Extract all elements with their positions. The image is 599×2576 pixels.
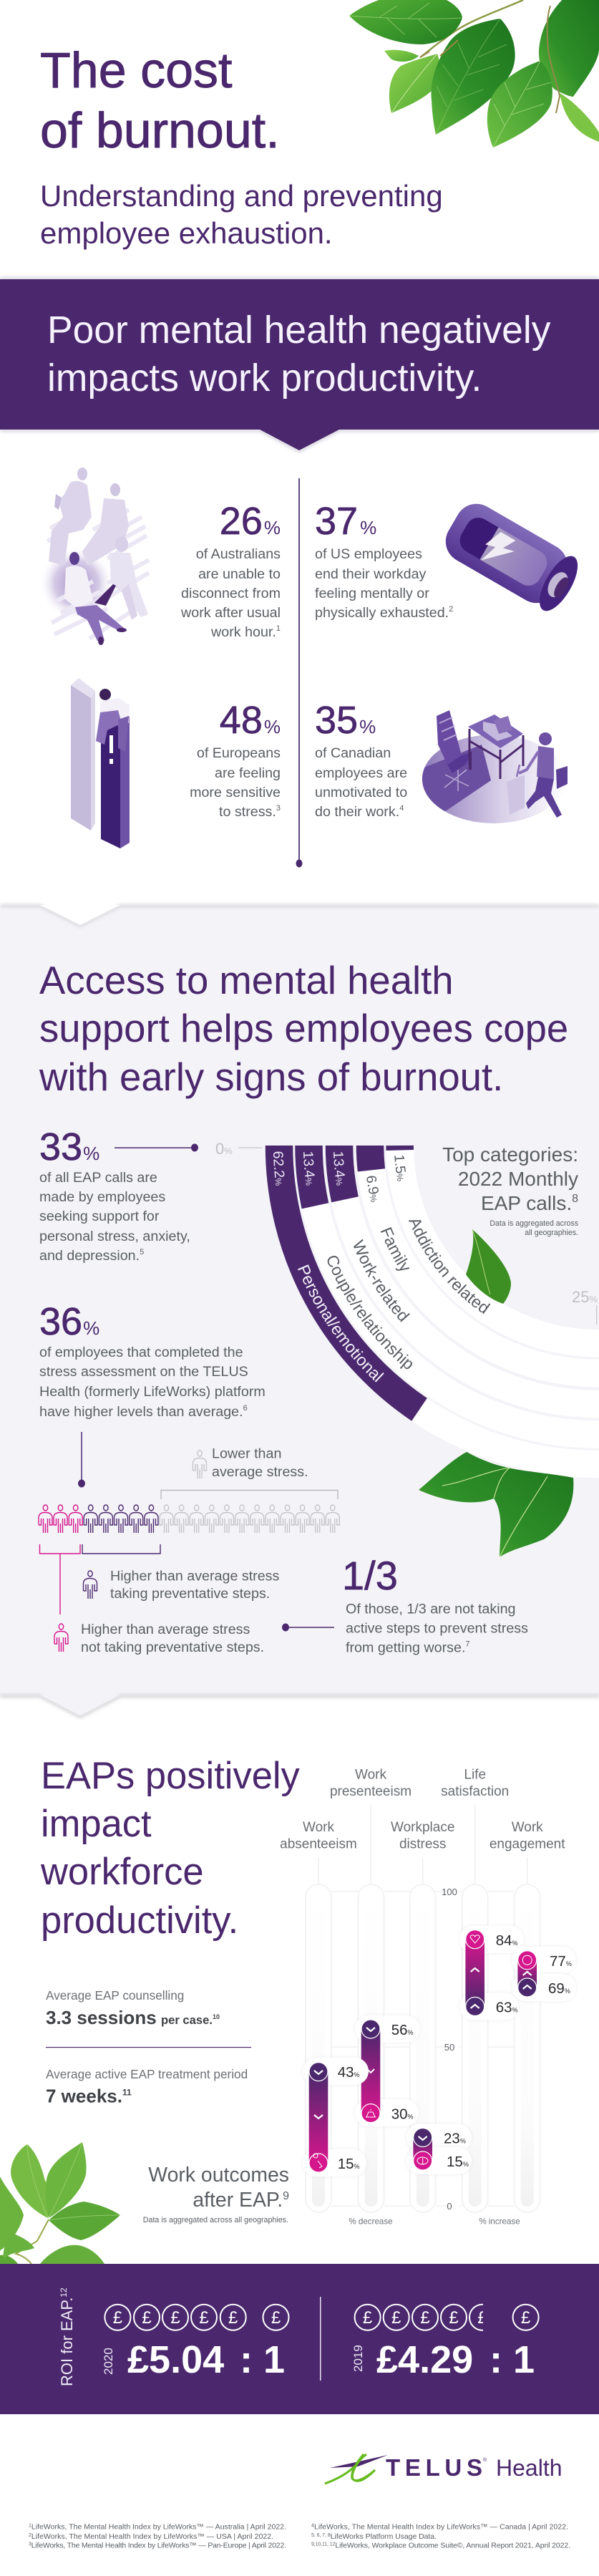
- footnotes right: LifeWorks, The Mental Health Index by LifeWorks™ — Canada | April 2022.: [314, 2523, 568, 2532]
- panel: ROI band: [0, 2264, 599, 2414]
- chart: work outcomes capsules: presenteeism: [330, 1784, 411, 1799]
- stat: 37% US employees: end their workday: [315, 566, 427, 582]
- value 2019: :: [490, 2338, 502, 2381]
- icon: desk and person leaving: [419, 710, 568, 823]
- stat: 48% Europeans: 48%: [220, 699, 281, 742]
- bar: workplace distress: 15%: [447, 2154, 469, 2170]
- coins 2020: £: [142, 2308, 152, 2328]
- fractional coin: [513, 2305, 539, 2330]
- legend: higher not taking steps: [54, 1622, 264, 1655]
- gray people: [160, 1505, 339, 1533]
- value 2020: 2020: [102, 2348, 115, 2375]
- stat: counselling sessions: Average EAP counselling: [46, 1988, 184, 2003]
- coins 2020: £: [199, 2308, 209, 2328]
- stat: treatment period: 11: [122, 2088, 132, 2098]
- logo: TELUS Health: Health: [496, 2455, 563, 2481]
- value 2019: 2019: [351, 2345, 365, 2372]
- chart title: top categories: Data is aggregated across: [490, 1219, 578, 1228]
- stat: 35% Canadian employees: employees are: [315, 765, 407, 781]
- stat: 26% Australians: are unable to: [198, 566, 281, 582]
- chart title: work outcomes: Work outcomes: [148, 2164, 289, 2187]
- dark people: [84, 1505, 158, 1533]
- coins 2020: £: [271, 2308, 281, 2328]
- radial bar chart: 25%: [572, 1288, 598, 1306]
- legend: lower than average: Lower than: [212, 1446, 281, 1462]
- icon: battery: [438, 496, 585, 616]
- legend: higher not taking steps: Higher than average stress: [81, 1622, 250, 1637]
- stat: one third: [282, 1553, 528, 1655]
- coins 2019: £: [391, 2308, 401, 2328]
- icon: person on pillar: [71, 678, 130, 848]
- value 2020: [102, 2338, 285, 2381]
- ROI label: 12: [59, 2287, 69, 2297]
- bar: work engagement: [512, 1947, 576, 2001]
- stat: 33% EAP calls: seeking support for: [39, 1209, 160, 1224]
- bar: work absenteeism: 43%: [338, 2064, 360, 2081]
- legend: higher taking steps: Higher than average stress: [110, 1568, 280, 1584]
- panel: purple banner: impacts work productivity.: [47, 357, 482, 400]
- section bottom arrow: [40, 1695, 120, 1715]
- heading: EAPs: [40, 1755, 301, 1942]
- panel: access section: [0, 905, 599, 1695]
- legend: higher not taking steps: not taking preventative steps.: [81, 1640, 264, 1655]
- radial bar chart: Personal/emotional: [298, 1264, 384, 1383]
- footnotes left: 2: [29, 2533, 31, 2538]
- radial bar chart: Work-related: [354, 1239, 410, 1322]
- heading: access: with early signs of burnout.: [39, 1055, 503, 1099]
- legend: lower than average: average stress.: [212, 1464, 308, 1480]
- chart: work outcomes capsules: Work: [512, 1820, 543, 1835]
- footnotes right: [311, 2523, 570, 2550]
- stat: one third: active steps to prevent stress: [346, 1621, 528, 1637]
- bar: work presenteeism: 56%: [391, 2022, 414, 2038]
- icon: leaves bottom left: [0, 2142, 120, 2264]
- footnotes left: 1: [29, 2524, 31, 2529]
- radial bar chart: 13.4 %: [303, 1152, 315, 1186]
- legend: higher taking steps: [83, 1568, 280, 1602]
- stat: counselling sessions: 10: [213, 2013, 220, 2020]
- chart: work outcomes capsules: distress: [399, 1837, 446, 1851]
- bar: work presenteeism: [355, 2015, 420, 2126]
- stat: 36% stress assessment: [39, 1300, 266, 1420]
- stat: 35% Canadian employees: do their work.: [315, 804, 399, 820]
- icon: large leaf: [419, 1452, 573, 1557]
- stat: 48% Europeans: to stress.: [219, 804, 276, 820]
- stat: 36% stress assessment: 6: [243, 1404, 248, 1413]
- logo: TELUS Health: [325, 2454, 563, 2484]
- section bottom shadow: [0, 1696, 599, 1717]
- chart: work outcomes capsules: Work: [303, 1820, 334, 1835]
- stat: 26% Australians: work hour.: [211, 624, 276, 640]
- stat: 26% Australians: 1: [276, 624, 281, 633]
- logo: TELUS Health: ®: [483, 2457, 487, 2463]
- coins 2020: [104, 2305, 289, 2330]
- heading: EAPs: EAPs positively: [41, 1755, 301, 1797]
- stat: 48% Europeans: of Europeans: [197, 745, 281, 761]
- bar: work engagement: 69%: [548, 1980, 570, 1997]
- chart title: top categories: 8: [572, 1193, 578, 1205]
- footnotes left: [29, 2523, 286, 2550]
- chart title: top categories: [442, 1143, 578, 1237]
- footnotes right: 5, 6, 7, 8: [311, 2533, 331, 2538]
- chart title: top categories: all geographies.: [525, 1229, 578, 1237]
- footnotes left: LifeWorks, The Mental Health Index by LifeWorks™ — Pan-Europe | April 2022.: [31, 2542, 286, 2550]
- chart title: top categories: 2022 Monthly: [458, 1168, 578, 1190]
- stat: 48% Europeans: more sensitive: [190, 785, 281, 800]
- value 2019: [351, 2338, 535, 2381]
- heading: access: Access to mental health: [39, 959, 454, 1002]
- stat: 48% Europeans: are feeling: [215, 765, 281, 781]
- coins 2019: [355, 2305, 495, 2330]
- chart title: top categories: Top categories:: [442, 1143, 578, 1166]
- coins 2020: £: [228, 2308, 238, 2328]
- subtitle: [40, 179, 443, 250]
- stat: 36% stress assessment: have higher levels than average.: [39, 1404, 243, 1420]
- title: [40, 42, 280, 158]
- footnotes left: 3: [29, 2542, 31, 2547]
- bar: work absenteeism: 15%: [338, 2156, 360, 2172]
- coins 2019: £: [420, 2308, 430, 2328]
- heading: EAPs: impact: [41, 1803, 152, 1845]
- chart title: work outcomes: Data is aggregated across all geographies.: [143, 2216, 288, 2224]
- stat: 36% stress assessment: 36%: [39, 1300, 99, 1343]
- subtitle: Understanding and preventing: [40, 179, 443, 213]
- stat: treatment period: 7 weeks.: [46, 2085, 122, 2106]
- stat: 35% Canadian employees: [315, 699, 407, 820]
- chart: work outcomes capsules: absenteeism: [280, 1837, 357, 1851]
- bar: life satisfaction: [459, 1926, 524, 2020]
- stat: 35% Canadian employees: unmotivated to: [315, 785, 407, 800]
- footnotes right: LifeWorks Platform Usage Data.: [331, 2532, 437, 2541]
- stat: 36% stress assessment: Health (formerly LifeWorks) platform: [39, 1384, 266, 1400]
- stat: 33% EAP calls: personal stress, anxiety,: [39, 1229, 190, 1244]
- value 2019: 1: [513, 2338, 535, 2381]
- footnotes right: 4: [311, 2524, 314, 2529]
- stat: 37% US employees: of US employees: [315, 546, 422, 562]
- stat: counselling sessions: [46, 1988, 220, 2028]
- stat: 36% stress assessment: stress assessment on the TELUS: [39, 1364, 248, 1380]
- stat: treatment period: [46, 2067, 248, 2106]
- stat: 37% US employees: 2: [449, 605, 453, 614]
- stat: 33% EAP calls: [39, 1125, 198, 1264]
- ROI band shadow: [0, 2262, 599, 2264]
- legend: higher taking steps: taking preventative steps.: [110, 1586, 270, 1602]
- value 2020: 1: [263, 2338, 285, 2381]
- panel: purple banner: [0, 279, 599, 450]
- stat: 26% Australians: 26%: [220, 500, 281, 543]
- pictogram: people row: [39, 1505, 339, 1533]
- stat: 35% Canadian employees: of Canadian: [315, 745, 391, 761]
- bar: workplace distress: 23%: [444, 2131, 466, 2146]
- title: The cost: [40, 42, 232, 98]
- stat: 33% EAP calls: 33%: [39, 1125, 99, 1168]
- chart title: top categories: EAP calls.: [481, 1192, 572, 1214]
- radial bar chart: 1.5%: [394, 1156, 406, 1181]
- bracket: higher taking steps: [82, 1544, 160, 1554]
- coins 2019: £: [477, 2308, 487, 2328]
- stat: 48% Europeans: [190, 699, 281, 820]
- footnotes right: LifeWorks, Workplace Outcome Suite©, Annual Report 2021, April 2022.: [335, 2542, 570, 2550]
- chart: work outcomes capsules: % decrease: [349, 2217, 393, 2227]
- stat: treatment period: Average active EAP treatment period: [46, 2067, 248, 2081]
- radial bar chart: 0%: [215, 1140, 233, 1158]
- stat: 33% EAP calls: of all EAP calls are: [39, 1170, 157, 1186]
- radial bar chart: 62.2 %: [273, 1151, 285, 1186]
- value 2020: :: [240, 2338, 253, 2381]
- legend: lower than average: [193, 1446, 308, 1480]
- heading: access: [39, 959, 568, 1099]
- chart: work outcomes capsules: satisfaction: [441, 1784, 509, 1799]
- radial bar chart: Family: [381, 1227, 409, 1271]
- stat: 26% Australians: work after usual: [180, 605, 281, 621]
- radial bar chart: Addiction related: [409, 1220, 491, 1314]
- logo: TELUS Health: TELUS: [386, 2454, 487, 2481]
- stat: counselling sessions: per case.: [161, 2013, 213, 2027]
- heading: EAPs: workforce: [40, 1851, 204, 1893]
- chart: work outcomes capsules: 50: [444, 2042, 454, 2053]
- footnotes left: LifeWorks, The Mental Health Index by LifeWorks™ — Australia | April 2022.: [31, 2523, 286, 2532]
- chart title: work outcomes: after EAP.: [193, 2189, 283, 2212]
- icon: people on bench: [39, 468, 149, 645]
- stat: 33% EAP calls: and depression.: [39, 1248, 140, 1264]
- bar: work absenteeism: [303, 2058, 369, 2176]
- bar: workplace distress: [406, 2124, 472, 2174]
- stat: 33% EAP calls: made by employees: [39, 1189, 165, 1205]
- pink people: [39, 1505, 82, 1533]
- stat: 35% Canadian employees: 4: [399, 804, 404, 813]
- chart: work outcomes capsules: Life: [464, 1768, 486, 1783]
- chart: work outcomes capsules: 0: [447, 2201, 452, 2212]
- stat: 26% Australians: of Australians: [196, 546, 281, 562]
- stat: 33% EAP calls: 5: [140, 1248, 144, 1256]
- value 2020: £5.04: [127, 2338, 224, 2381]
- chart: work outcomes capsules: engagement: [490, 1837, 565, 1851]
- leaves: top right: [349, 0, 599, 147]
- band shadow: [0, 279, 599, 451]
- chart: work outcomes capsules: [280, 1768, 576, 2227]
- ROI label: ROI for EAP.: [58, 2297, 76, 2386]
- bracket: higher not taking steps: [40, 1544, 80, 1614]
- radial bar chart: [215, 1140, 599, 1478]
- chart: work outcomes capsules: 100: [442, 1887, 457, 1897]
- stat: 37% US employees: physically exhausted.: [315, 605, 449, 621]
- stat: 37% US employees: 37%: [315, 500, 376, 543]
- radial bar chart: 13.4%: [333, 1152, 345, 1186]
- chart title: work outcomes: 9: [283, 2190, 289, 2202]
- stat: 36% stress assessment: of employees that completed the: [39, 1345, 243, 1360]
- coins 2020: £: [170, 2308, 180, 2328]
- coins 2019: £: [449, 2308, 459, 2328]
- stat: 48% Europeans: 3: [276, 804, 281, 813]
- icon: small leaf: [466, 1229, 511, 1304]
- bar: life satisfaction: 84%: [496, 1932, 518, 1949]
- coins 2020: £: [113, 2308, 122, 2328]
- heading: access: support helps employees cope: [39, 1007, 568, 1050]
- stat: one third: from getting worse.: [346, 1640, 465, 1655]
- bracket: lower than average: [161, 1491, 338, 1499]
- chart: work outcomes capsules: % increase: [479, 2217, 520, 2227]
- footnotes left: LifeWorks, The Mental Health Index by LifeWorks™ — USA | April 2022.: [31, 2532, 273, 2541]
- stat: 37% US employees: feeling mentally or: [315, 586, 429, 601]
- panel: purple banner: Poor mental health negatively: [47, 309, 551, 352]
- stat: 35% Canadian employees: 35%: [315, 699, 376, 742]
- chart title: work outcomes: [143, 2164, 289, 2224]
- stat: counselling sessions: 3.3 sessions: [46, 2007, 157, 2028]
- leader line to people row: [78, 1432, 85, 1488]
- value 2019: £4.29: [376, 2338, 473, 2381]
- chart: work outcomes capsules: Workplace: [391, 1820, 454, 1835]
- subtitle: employee exhaustion.: [40, 216, 333, 250]
- title: of burnout.: [40, 102, 280, 158]
- chart: work outcomes capsules: Work: [355, 1768, 386, 1783]
- radial bar chart: Couple/relationship: [328, 1256, 412, 1369]
- radial bar chart: 6.9%: [366, 1176, 379, 1202]
- fractional coin: £: [521, 2308, 530, 2328]
- bar: life satisfaction: 63%: [496, 1999, 518, 2016]
- stat: 26% Australians: [180, 500, 281, 640]
- stat: one third: 7: [465, 1640, 470, 1648]
- stat: one third: 1/3: [342, 1553, 398, 1598]
- footnotes right: 9,10,11, 12: [311, 2542, 336, 2547]
- coins 2019: £: [363, 2308, 372, 2328]
- divider: [46, 2047, 251, 2048]
- stat: 37% US employees: [315, 500, 453, 621]
- bar: work engagement: 77%: [550, 1953, 572, 1970]
- bar: work presenteeism: 30%: [391, 2106, 414, 2122]
- stat: 26% Australians: disconnect from: [181, 586, 281, 601]
- divider with end dot: [296, 478, 302, 868]
- stat: one third: Of those, 1/3 are not taking: [346, 1601, 515, 1617]
- heading: EAPs: productivity.: [41, 1899, 238, 1942]
